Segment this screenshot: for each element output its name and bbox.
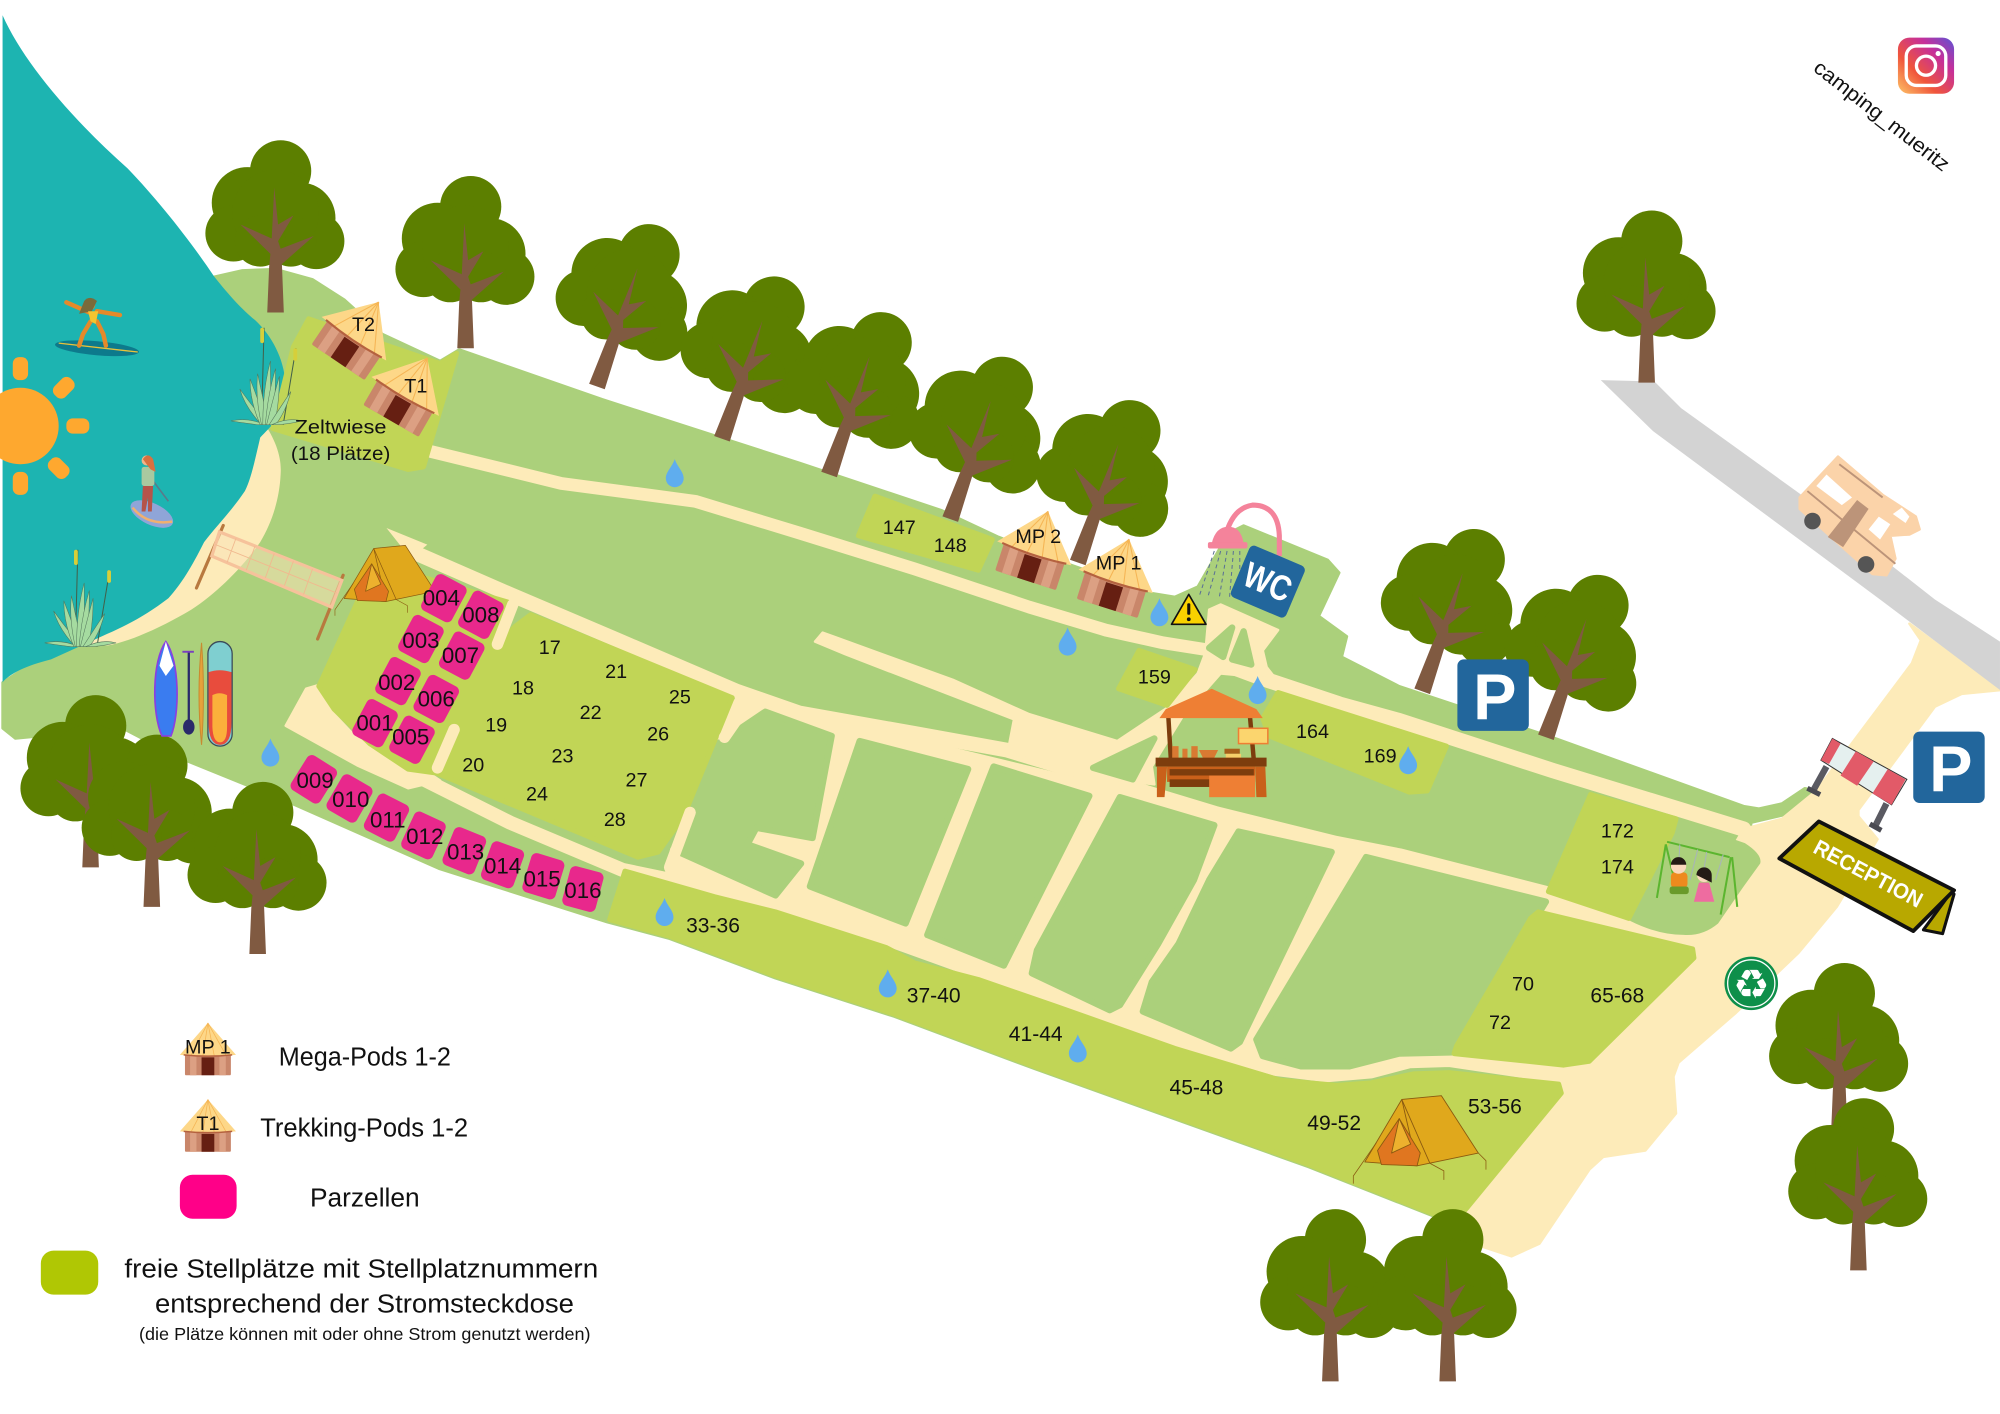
Zeltwiese label: (18 Plätze): [291, 443, 390, 465]
tent small: [335, 545, 441, 616]
surfer: [54, 298, 140, 359]
pitch numbers: 45-48: [1170, 1076, 1223, 1099]
green meadow plots: [665, 628, 1546, 1066]
green park base: [3, 269, 1816, 1224]
WC sign: WC: [1237, 554, 1298, 610]
pink parcels 001-008: 008: [462, 602, 499, 627]
top sand path: [431, 452, 1212, 650]
pitch numbers: 20: [462, 754, 484, 776]
pod MP 1: [1070, 527, 1166, 620]
recycling sign: [1724, 957, 1778, 1010]
pink parcels 009-016: 009: [296, 768, 334, 793]
P sign right: [1913, 732, 1985, 805]
grey access road: [1601, 380, 2000, 690]
warning sign: [1172, 594, 1206, 624]
lime pitch areas: [273, 319, 1694, 1222]
lake: [3, 15, 286, 682]
pitch numbers: 174: [1601, 856, 1634, 878]
pitch numbers: 26: [647, 724, 669, 746]
legend: free pitches: [41, 1251, 598, 1344]
swing with children: [1657, 842, 1737, 915]
lower road: [301, 717, 1569, 1078]
pitch numbers: 23: [552, 745, 574, 767]
pitch numbers: 33-36: [686, 915, 740, 938]
recycling sign: ♻: [1733, 961, 1770, 1009]
pink parcels 009-016: 015: [523, 866, 561, 891]
right entrance sand road: [1464, 624, 2000, 1256]
reeds: [45, 328, 302, 647]
legend: mega pods: Mega-Pods 1-2: [279, 1044, 451, 1072]
pink parcels 009-016: 011: [370, 808, 406, 833]
reception sign: RECEPTION: [1809, 834, 1927, 913]
pink parcels 009-016: 010: [332, 787, 369, 812]
P sign right: P: [1929, 732, 1973, 805]
sports boards: [155, 642, 232, 746]
legend: mega pods: MP 1: [185, 1037, 231, 1059]
pink parcels 009-016: 014: [484, 854, 521, 879]
pitch numbers: 19: [485, 715, 507, 737]
legend: parcels: Parzellen: [310, 1185, 420, 1213]
shower: [1199, 505, 1279, 597]
tent large: [1353, 1096, 1486, 1184]
upper main road: [1222, 663, 1744, 829]
P sign left: P: [1473, 660, 1517, 733]
sand interior between plots: [663, 695, 1709, 1078]
pitch numbers: 72: [1489, 1012, 1511, 1034]
sun: [0, 357, 89, 495]
pink parcels 001-008: [350, 572, 506, 766]
legend: free pitches: entsprechend der Stromsteckdose: [155, 1290, 574, 1318]
sand junction and diagonal roads: [815, 605, 1278, 784]
legend: parcels: [180, 1175, 420, 1219]
pitch numbers: 21: [605, 661, 627, 683]
pink parcels 001-008: 002: [378, 670, 415, 695]
pink parcels 001-008: 006: [418, 686, 455, 711]
pod T1: [357, 338, 461, 440]
reception sign: [1779, 821, 1954, 934]
pitch numbers: 49-52: [1307, 1112, 1361, 1135]
pitch numbers: 25: [669, 687, 691, 709]
pink parcels 009-016: 012: [406, 824, 443, 849]
pod T1: T1: [404, 375, 427, 397]
pitch numbers: 53-56: [1468, 1096, 1522, 1119]
camper van: [1800, 457, 1920, 575]
pod MP 2: MP 2: [1015, 526, 1061, 548]
pitch numbers: 18: [512, 678, 534, 700]
beach sand: [77, 421, 281, 645]
tapered road start: [386, 528, 427, 559]
water points: [261, 459, 1417, 1062]
pitch numbers: 65-68: [1590, 985, 1644, 1008]
pitch numbers: 148: [934, 535, 967, 557]
instagram icon: [1898, 38, 1954, 94]
short sand spurs: [438, 605, 747, 867]
Zeltwiese label: [291, 416, 390, 465]
instagram handle: camping_mueritz: [1809, 57, 1953, 176]
market stall: [1156, 689, 1268, 797]
pink parcels 001-008: 003: [402, 628, 440, 653]
pitch numbers: 37-40: [907, 985, 961, 1008]
legend: [41, 1023, 598, 1344]
P sign left: [1457, 659, 1529, 733]
legend: free pitches: (die Plätze können mit oder ohne Strom genutzt werden): [139, 1324, 591, 1344]
volleyball net: [196, 525, 343, 639]
pink parcels 001-008: 001: [356, 711, 394, 736]
pitch numbers: 41-44: [1009, 1023, 1063, 1046]
pitch numbers: 22: [580, 702, 602, 724]
pod MP 2: [988, 499, 1085, 592]
pitch numbers: 24: [526, 784, 548, 806]
Zeltwiese label: Zeltwiese: [295, 416, 387, 438]
pitch numbers: 27: [626, 770, 647, 792]
road barrier: [1807, 739, 1907, 830]
pitch numbers: 28: [604, 809, 626, 831]
pink parcels 001-008: 005: [392, 725, 429, 750]
legend: trekking pods: [180, 1099, 468, 1152]
central long road: [411, 551, 1716, 944]
legend: trekking pods: T1: [196, 1113, 219, 1135]
legend: mega pods: [180, 1023, 451, 1075]
pod MP 1: MP 1: [1096, 553, 1142, 575]
pitch numbers: [462, 517, 1644, 1135]
pitch numbers: 70: [1512, 974, 1534, 996]
pod T2: T2: [352, 314, 375, 336]
swing meadow: [1630, 820, 1761, 935]
pitch numbers: 147: [883, 517, 916, 539]
pitch numbers: 17: [539, 637, 561, 659]
pink parcels 009-016: [288, 753, 605, 913]
legend: trekking pods: Trekking-Pods 1-2: [260, 1114, 468, 1142]
pitch numbers: 172: [1601, 821, 1634, 843]
pink parcels 001-008: 004: [423, 586, 460, 611]
pitch numbers: 164: [1296, 721, 1329, 743]
sand blob at lower left: [286, 685, 440, 788]
pink parcels 001-008: 007: [442, 643, 479, 668]
pitch numbers: 159: [1138, 666, 1171, 688]
pink parcels 009-016: 016: [564, 878, 602, 903]
legend: free pitches: freie Stellplätze mit Stellplatznummern: [124, 1255, 598, 1283]
pink parcels 009-016: 013: [447, 840, 484, 865]
pitch numbers: 169: [1364, 745, 1397, 767]
paddleboarder: [126, 455, 177, 534]
pod T2: [306, 280, 411, 384]
